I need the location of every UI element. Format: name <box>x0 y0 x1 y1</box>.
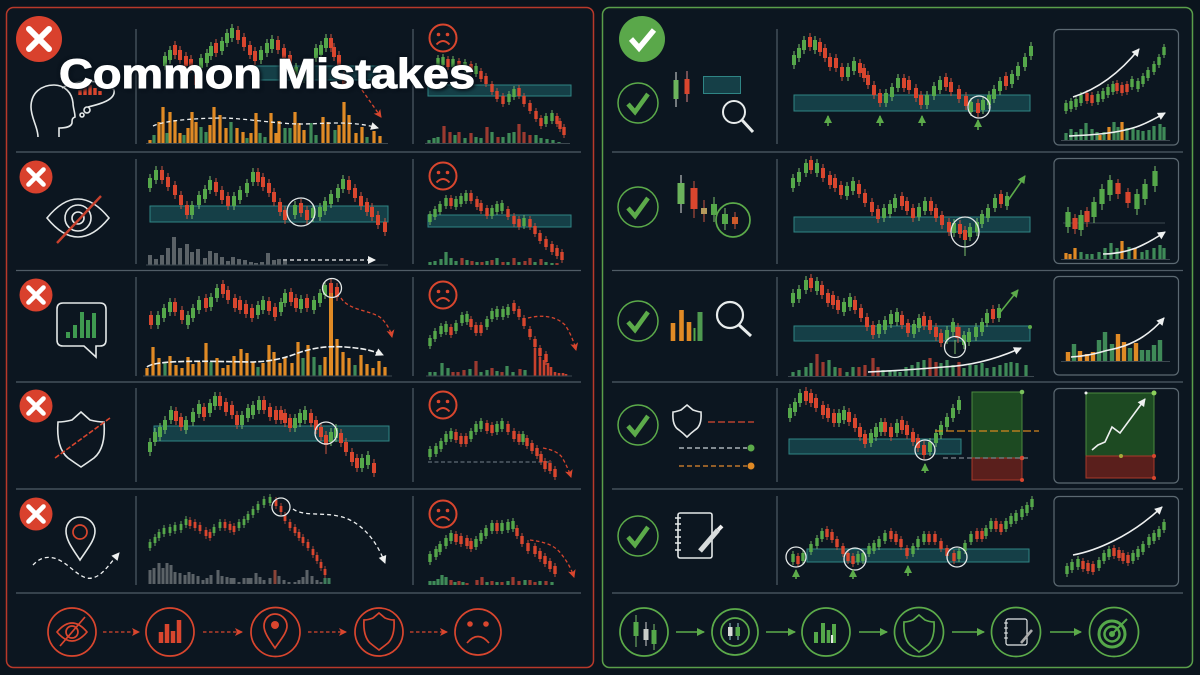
chart: row 2 outcome <box>428 197 571 265</box>
icon: flow bars <box>802 608 850 656</box>
chart: row 1 right candlesticks <box>794 42 1031 130</box>
arrow: flow 4 <box>952 631 984 633</box>
icon: crossed eye <box>47 196 109 243</box>
icon: sad face row 2 <box>430 162 456 190</box>
icon: flow target <box>1090 608 1138 656</box>
icon: sad face row 1 <box>430 24 456 52</box>
icon: row 5 cross <box>20 498 52 530</box>
chart: row 2 right candlesticks <box>793 165 1030 256</box>
icon: row 3 check <box>618 301 658 341</box>
arrow: flow 3 <box>859 631 887 633</box>
chart: row 1 outcome <box>425 61 571 144</box>
icon: row 1 check <box>618 83 658 123</box>
icon: notebook and pen <box>675 513 722 558</box>
chart: row 2 candlesticks and volume <box>146 175 388 265</box>
icon: row 3 cross <box>20 278 52 312</box>
arrow: flow 2 <box>203 631 242 633</box>
icon: candle pattern with ring <box>678 175 750 237</box>
icon: flow bars <box>146 608 194 656</box>
panel: row 3 result box <box>1054 276 1178 375</box>
chart: row 4 candlesticks <box>150 401 389 468</box>
icon: volume bars and magnifier <box>673 302 751 341</box>
flow: mistake chain <box>48 608 501 656</box>
chart: row 1 candlesticks and volume <box>146 33 388 144</box>
icon: chat bubble with bars <box>57 303 106 357</box>
icon: flow shield <box>355 608 403 656</box>
panel: row 4 result box <box>1054 388 1178 483</box>
icon: flow ringed candles <box>712 609 758 655</box>
title: Common Mistakes <box>59 50 475 97</box>
arrow: flow 5 <box>1050 631 1081 633</box>
icon: flow shield <box>894 608 944 656</box>
icon: location pin and dashed path <box>33 517 119 578</box>
chart: row 3 candlesticks and volume spike <box>143 278 392 376</box>
panel: row 1 result box <box>1054 30 1178 145</box>
panel: row 5 result box <box>1054 496 1178 586</box>
icon: row 4 cross <box>20 390 52 422</box>
arrow: flow 2 <box>766 631 795 633</box>
panel: row 2 result box <box>1054 158 1178 264</box>
icon: row 5 check <box>618 516 658 556</box>
panel: best practices <box>602 8 1192 668</box>
icon: sad face row 5 <box>430 500 456 528</box>
icon: row 2 check <box>618 187 658 227</box>
icon: flow candles <box>620 608 668 656</box>
icon: large red cross <box>16 16 62 62</box>
arrow: flow 3 <box>308 631 346 633</box>
chart: row 3 outcome <box>426 307 576 376</box>
arrow: flow 1 <box>676 631 704 633</box>
chart: row 5 right candlesticks <box>786 503 1032 579</box>
icon: thinking head <box>31 82 114 137</box>
icon: flow pin <box>251 608 300 656</box>
icon: flow notebook <box>992 608 1040 656</box>
icon: row 2 cross <box>20 160 52 194</box>
icon: row 4 check <box>618 405 658 445</box>
arrow: flow 1 <box>103 631 139 633</box>
chart: row 5 outcome <box>430 525 574 585</box>
chart: row 3 right candlesticks and volume <box>788 283 1034 376</box>
arrow: flow 4 <box>410 631 447 633</box>
icon: candles, zone, magnifier <box>674 71 753 132</box>
chart: row 4 right candlesticks and trade zones <box>789 390 1039 482</box>
icon: crossed shield <box>55 412 110 467</box>
icon: flow eye <box>48 608 96 656</box>
panel: mistakes <box>6 8 594 668</box>
icon: flow sad face <box>455 609 501 655</box>
chart: row 4 outcome <box>428 425 571 477</box>
icon: sad face row 3 <box>430 282 456 308</box>
chart: row 5 candlesticks and volume <box>150 498 385 584</box>
icon: large green check <box>619 16 665 62</box>
flow: correct process <box>620 608 1138 656</box>
icon: sad face row 4 <box>430 392 456 418</box>
icon: shield with risk levels <box>673 405 754 470</box>
